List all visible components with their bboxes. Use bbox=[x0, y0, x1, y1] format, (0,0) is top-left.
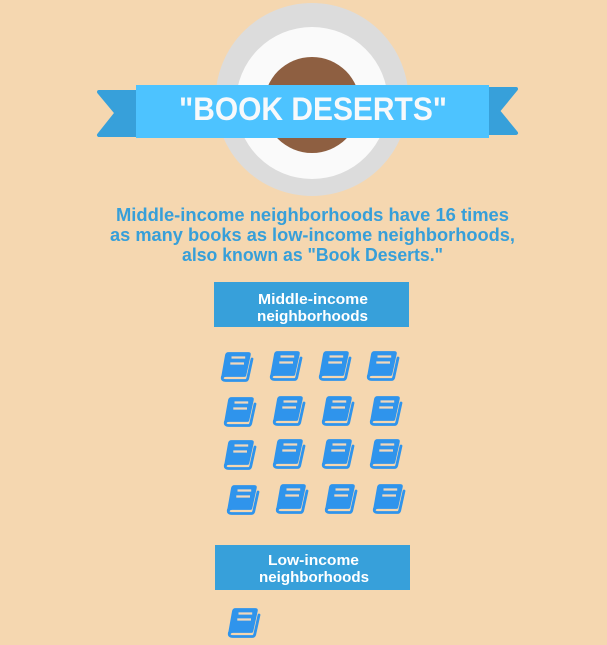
pictogram: 16 books for middle-income bbox=[222, 352, 404, 514]
heading: middle-income neighborhoods bbox=[214, 282, 409, 327]
heading: low-income neighborhoods: Low-income bbox=[268, 552, 359, 569]
ribbon left tail bbox=[99, 92, 137, 135]
emblem: concentric circles bbox=[216, 3, 408, 196]
description text: also known as "Book Deserts." bbox=[182, 245, 443, 265]
title: "BOOK DESERTS" bbox=[179, 91, 447, 127]
heading: low-income neighborhoods bbox=[215, 545, 410, 590]
heading: low-income neighborhoods: neighborhoods bbox=[259, 569, 369, 586]
description text: Middle-income neighborhoods have 16 times bbox=[116, 205, 509, 225]
icon: single book for low-income bbox=[229, 608, 259, 636]
heading: middle-income neighborhoods: neighborhoods bbox=[257, 308, 368, 325]
heading: middle-income neighborhoods: Middle-income bbox=[258, 291, 368, 308]
description text bbox=[110, 205, 515, 265]
description text: as many books as low-income neighborhoods, bbox=[110, 225, 515, 245]
ribbon right tail bbox=[488, 89, 516, 133]
title banner bbox=[136, 85, 489, 138]
